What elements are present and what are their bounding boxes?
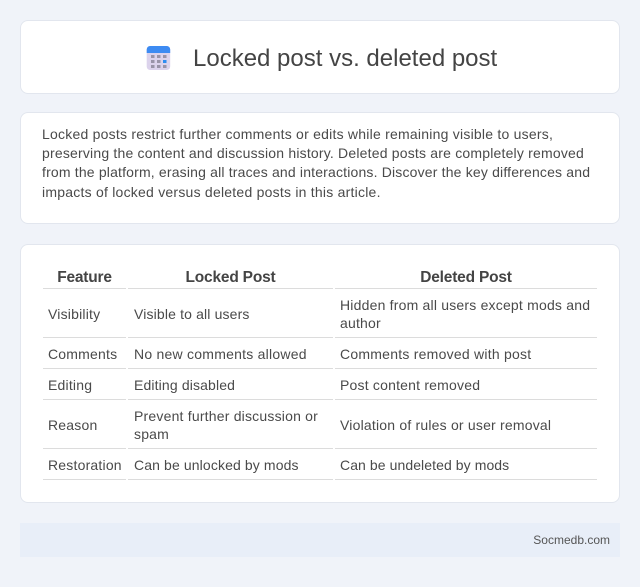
- table: Violation of rules or user removal: [340, 417, 551, 433]
- table: Can be unlocked by mods: [134, 457, 299, 473]
- table: author: [340, 315, 381, 331]
- row: restoration: Restoration: [48, 457, 122, 473]
- row: visibility: Visibility: [48, 306, 100, 322]
- header: deleted post: Deleted Post: [420, 269, 512, 286]
- intro text: from the platform, erasing all traces and interactions. Discover the key differences and: [42, 164, 590, 180]
- table card: [20, 244, 620, 503]
- intro text: preserving the content and discussion history. Deleted posts are completely removed: [42, 145, 584, 161]
- title: Locked post vs. deleted post: [193, 45, 497, 72]
- row: reason: Reason: [48, 417, 97, 433]
- footer bar: [20, 523, 620, 557]
- table: [43, 269, 597, 480]
- table: Comments removed with post: [340, 346, 531, 362]
- row: comments: Comments: [48, 346, 117, 362]
- header: feature: Feature: [57, 269, 112, 286]
- title card: [20, 20, 620, 94]
- intro text: impacts of locked versus deleted posts in this article.: [42, 184, 381, 200]
- footer text: Socmedb.com: [533, 533, 610, 547]
- header: locked post: Locked Post: [186, 269, 275, 286]
- intro card: [20, 112, 620, 224]
- table: Editing disabled: [134, 377, 235, 393]
- row: editing: Editing: [48, 377, 92, 393]
- table: No new comments allowed: [134, 346, 307, 362]
- table: Can be undeleted by mods: [340, 457, 509, 473]
- intro text: Locked posts restrict further comments or edits while remaining visible to users,: [42, 126, 553, 142]
- table: Hidden from all users except mods and: [340, 297, 590, 313]
- intro text: [42, 126, 590, 200]
- table: Post content removed: [340, 377, 480, 393]
- icon: calendar: [146, 46, 170, 70]
- table: Prevent further discussion or: [134, 408, 318, 424]
- table: spam: [134, 426, 169, 442]
- table: Visible to all users: [134, 306, 250, 322]
